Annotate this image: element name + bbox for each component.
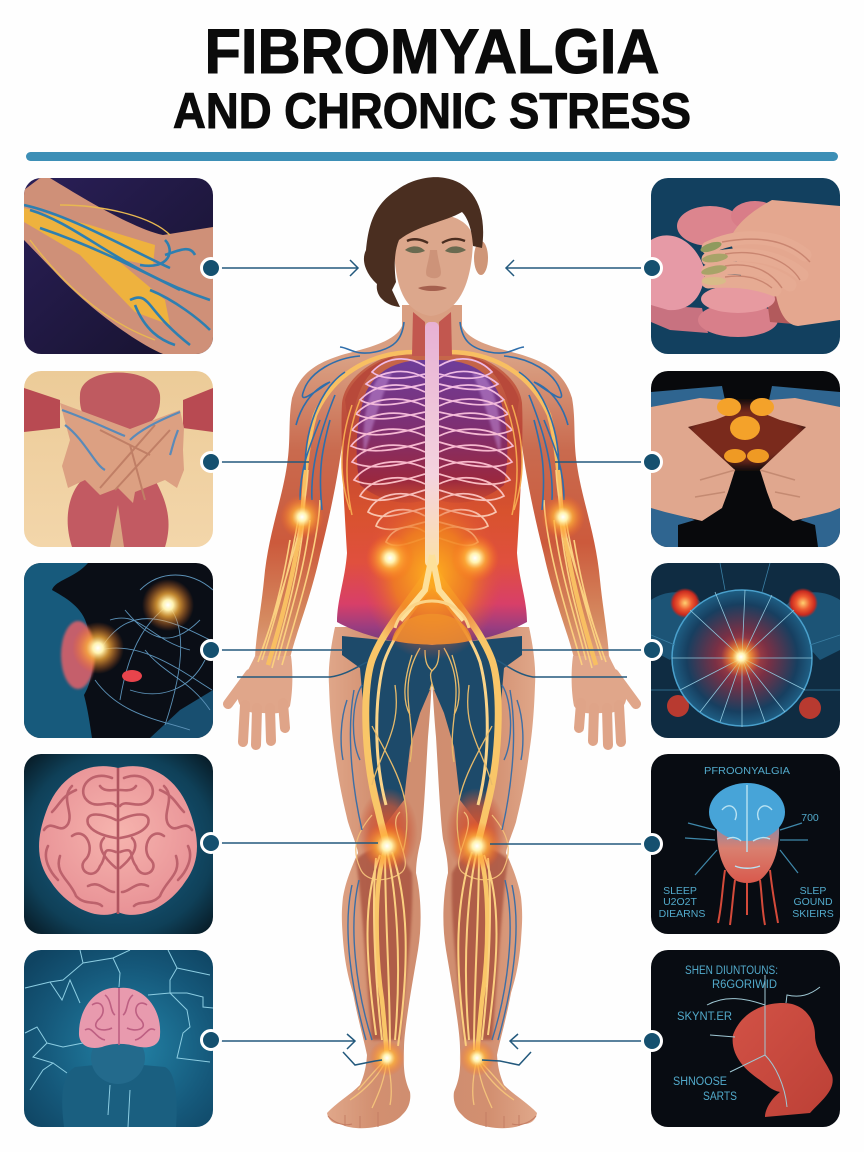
connector: panel 2 to arm: [211, 461, 309, 463]
spine: [425, 322, 439, 567]
skin gap between muscles: [110, 505, 124, 547]
title: AND CHRONIC STRESS: [173, 83, 691, 139]
brain folds and nose: [722, 785, 772, 868]
figure left half and mirrored right half: [228, 305, 636, 1128]
panel labels: [673, 965, 778, 1103]
fingers: [100, 425, 170, 500]
middle muscle: [701, 285, 775, 313]
panel labels: SHEN DIUNTOUNS:: [685, 965, 778, 977]
panel labels: SLEEP: [663, 885, 697, 897]
panel labels: 700: [801, 812, 819, 824]
nerve web: [95, 575, 213, 730]
pain point: left knee: [363, 822, 411, 870]
lower muscle: [698, 308, 778, 337]
panel labels: SKYNT.ER: [677, 1011, 732, 1023]
panel: head with annotations: [651, 754, 840, 934]
blotch: upper right: [788, 588, 818, 618]
upper muscle: [677, 206, 743, 246]
connector: right panel 4 to knee: [490, 843, 652, 845]
abdominal glow: [362, 490, 502, 660]
panel labels: DIEARNS: [659, 908, 705, 920]
finger lines: [695, 470, 800, 497]
red strands: [718, 870, 778, 925]
central body figure: [228, 177, 636, 1128]
veins: [62, 410, 180, 470]
brain: [79, 988, 160, 1048]
pain point: left ankle: [369, 1040, 405, 1076]
panel labels: PFROONYALGIA: [704, 765, 790, 777]
skin of forearm: [24, 178, 213, 354]
thin gold outlines: [30, 205, 170, 340]
fingers: [708, 238, 805, 290]
brain: [709, 783, 785, 841]
center glow: [721, 637, 761, 677]
sleeves: [651, 386, 840, 547]
panel: radiating sphere: [651, 563, 840, 738]
brain: [39, 766, 197, 915]
connector: right panel 1 to head: [506, 260, 652, 276]
panel: brain: [24, 754, 213, 934]
glowing joints: [717, 398, 774, 463]
panel: nerves in the arm: [24, 178, 213, 354]
left hand: [651, 398, 735, 521]
crossed hands: [60, 403, 184, 503]
blue nerve lines: [685, 823, 808, 875]
pain point: left abdomen: [366, 534, 414, 582]
finger lines: [722, 239, 810, 288]
panel: brain over stressed figure: [24, 950, 213, 1127]
connector dots: [202, 258, 662, 1050]
pain point: right abdomen: [451, 534, 499, 582]
panel labels: SKIEIRS: [792, 908, 834, 920]
eyebrows: [407, 239, 465, 243]
sphere rays: [672, 590, 812, 727]
upper blue shapes: [651, 592, 840, 660]
figure: [62, 1065, 177, 1127]
connector: panel 4 to knee: [211, 842, 378, 844]
ear: [474, 241, 488, 275]
right hand: [760, 398, 840, 521]
connector: panel 5 to ankle: [211, 1034, 382, 1065]
hair: [364, 177, 483, 307]
forearm muscles: [24, 388, 213, 432]
blotch: lower right: [799, 697, 821, 719]
blotch: lower left: [667, 695, 689, 717]
panel: hands with inflamed joints: [651, 371, 840, 547]
pain point: right ankle: [459, 1040, 495, 1076]
head: [364, 177, 488, 316]
teal and blue nerves: [24, 205, 210, 345]
outer lines: [651, 563, 840, 690]
connector: right panel 5 to ankle: [482, 1034, 652, 1065]
panel labels: U2O2T: [663, 896, 698, 908]
upper muscle: [80, 372, 160, 430]
connector: panel 1 to head: [211, 260, 358, 276]
eyes: [405, 246, 466, 253]
panel labels: SHNOOSE: [673, 1076, 727, 1088]
panel: organ with annotations: [651, 950, 840, 1127]
panel: hand gripping muscle: [651, 178, 840, 354]
red shoulder glow: [61, 621, 95, 689]
pain point: right arm: [541, 495, 585, 539]
leader lines: [707, 975, 820, 1107]
red blotch: [122, 670, 142, 682]
gyri: [44, 768, 192, 914]
lower left muscle: [651, 305, 708, 333]
lower muscles: [68, 475, 169, 547]
upper muscle 2: [732, 201, 767, 222]
central red glow: [684, 405, 808, 465]
nails: [699, 240, 728, 285]
pain point: left arm: [280, 495, 324, 539]
sphere: [672, 590, 812, 726]
pelvic arch: [395, 601, 469, 628]
title divider: [26, 152, 838, 161]
organ: [733, 1003, 833, 1117]
panel labels: [659, 765, 834, 920]
lower pelvic band: [392, 614, 472, 644]
panel labels: SARTS: [703, 1091, 737, 1103]
panel: crossed hands and muscles: [24, 371, 213, 547]
connector: right panel 2 to arm: [555, 461, 652, 463]
gyri: [85, 988, 155, 1045]
panel labels: SLEP: [800, 885, 826, 897]
panel labels: GOUND: [793, 896, 833, 908]
pelvic nerve fork: [400, 555, 464, 620]
neck muscles: [412, 312, 452, 356]
connector: panel 3 to hip: [211, 650, 367, 677]
head: [92, 1044, 145, 1084]
panel: nerve pain signals: [24, 563, 213, 738]
face: [394, 214, 473, 316]
glow: shoulder: [72, 622, 124, 674]
title: [173, 17, 691, 139]
yellow nerve bundle: [24, 208, 170, 325]
panel labels: R6GORIWID: [712, 979, 777, 991]
face: [717, 825, 779, 883]
cracks: [25, 950, 213, 1127]
pain point: right knee: [453, 822, 501, 870]
lower right blue body: [150, 690, 213, 738]
glow: upper node: [142, 579, 194, 631]
dark tissue behind the hand: [768, 296, 791, 324]
title: FIBROMYALGIA: [204, 17, 660, 87]
blotch: upper left: [670, 588, 700, 618]
mouth: [418, 286, 447, 291]
nose: [426, 250, 441, 278]
hand back: [730, 200, 840, 326]
blue body silhouette: [24, 563, 92, 738]
left muscle mass: [651, 235, 704, 310]
connector: right panel 3 to hip: [497, 650, 652, 677]
